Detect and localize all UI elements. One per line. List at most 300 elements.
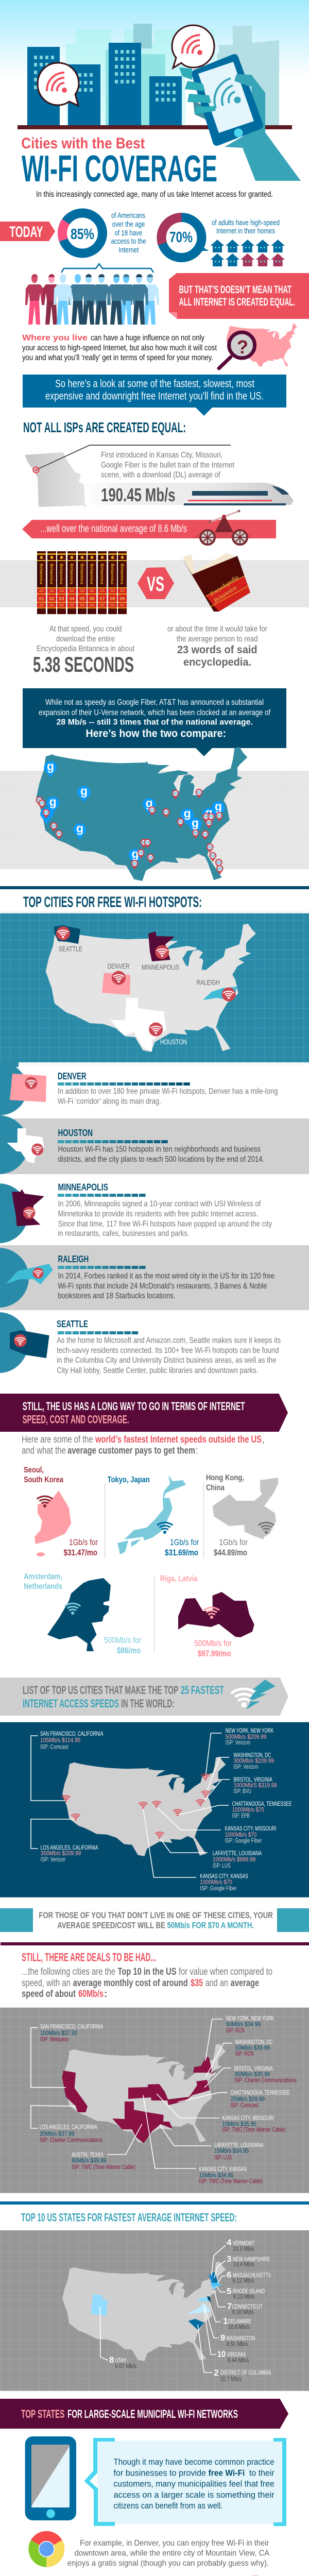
highlighted states <box>91 2272 221 2330</box>
icon: nine encyclopedia volumes: 02 <box>49 596 55 601</box>
panel: Houston: districts, and the city plans to reach 500 locations by the end of 2014. <box>58 1155 264 1164</box>
Google Fiber pins: g <box>192 816 199 829</box>
panel: Tokyo <box>108 1475 199 1557</box>
text: of adults: of adults have high-speed <box>212 219 280 227</box>
rank labels: DISTRICT OF COLUMBIA <box>220 2370 271 2376</box>
icon: nine encyclopedia volumes: 04 <box>69 596 75 601</box>
city labels: ISP: RCN <box>235 2051 253 2057</box>
text: top 10 for value: average monthly cost of around <box>73 1978 188 1989</box>
city labels: 15Mb/s $34.95 <box>214 2148 249 2155</box>
callout: AT&T comparison: Here’s how the two compare: <box>85 728 226 740</box>
rank labels: 4 <box>227 2238 232 2247</box>
city labels: ISP: LUS <box>214 2155 232 2161</box>
panel: Hong Kong: $44.89/mo <box>214 1548 247 1557</box>
callout: municipal free access: Though it may have become common practice <box>113 2457 274 2467</box>
Google Fiber pins: g <box>146 796 153 810</box>
leader lines <box>100 2245 226 2372</box>
panel: Houston: HOUSTON <box>58 1128 93 1138</box>
icon: nine encyclopedia volumes: 05 <box>79 596 85 601</box>
city labels: ISP: LUS <box>213 1863 231 1869</box>
rank labels: 10 <box>217 2349 226 2359</box>
city labels: ISP: Comcast <box>231 2103 259 2109</box>
text: fastest speeds outside the US: : <box>196 1446 198 1456</box>
callout: AT&T comparison: 28 Mb/s -- still 3 times that of the national average. <box>57 718 253 727</box>
banner: top 25 fastest speeds <box>0 1677 288 1716</box>
text: top 10 for value <box>22 1967 272 1999</box>
city labels: 300Mb/s $209.99 <box>234 1758 274 1765</box>
icon: Chrome logo <box>28 2531 64 2567</box>
panel: Riga: Riga, Latvia <box>160 1574 198 1583</box>
panel: Seattle: City Hall lobby, Seattle Center, public libraries and downtown parks. <box>57 1366 258 1375</box>
hand holding phone <box>179 58 301 181</box>
panel: Hong Kong: 1Gb/s for <box>219 1537 248 1547</box>
city labels: 50Mb/s $34.99 <box>226 2022 261 2028</box>
icon: nine encyclopedia volumes: 08 <box>110 596 115 601</box>
text: 23 words <box>167 625 268 668</box>
panel: Amsterdam: Amsterdam, <box>24 1572 62 1581</box>
icon: nine encyclopedia volumes: Britannica <box>69 564 74 584</box>
city labels: KANSAS CITY, KANSAS <box>200 1874 248 1880</box>
icon: phone <box>25 2436 76 2520</box>
text: fastest speeds outside the US: and what the <box>22 1446 66 1456</box>
map: Google Fiber and AT&T coverage <box>36 747 247 881</box>
city labels: 1000Mb/s $70 <box>225 1832 256 1838</box>
text: Denver and Mountain View: downtown area, while the entire city of Mountain View, CA <box>75 2549 269 2558</box>
text: Denver and Mountain View: enjoys a gratis signal (though you can probably guess why). <box>67 2559 269 2568</box>
text: 5.38 seconds: At that speed, you could <box>49 625 122 634</box>
panel: top 25 cities map <box>0 1722 309 1897</box>
icon: open encyclopedia book: Encyclopedia <box>208 573 239 598</box>
icon: US map with magnifier: ? <box>237 336 248 358</box>
city labels: ISP: BVU <box>234 1789 251 1795</box>
panel: Seoul: Seoul, <box>24 1466 44 1475</box>
city labels: NEW YORK, NEW YORK <box>226 1728 273 1734</box>
Google Fiber pins: g <box>80 784 88 798</box>
icon: US map with magnifier <box>219 324 297 368</box>
rank labels: 1 <box>223 2316 228 2326</box>
callout: look at the fastest: So here’s a look at some of the fastest, slowest, most <box>55 378 254 390</box>
panel: hotspot map <box>0 913 309 1062</box>
callout: average speed and cost <box>0 1908 309 1932</box>
header illustration: city skyline <box>0 0 309 181</box>
donut: 85 percent: 85% <box>71 226 94 243</box>
text: top 10 for value: $35 <box>191 1978 203 1989</box>
city labels: LOS ANGELES, CALIFORNIA <box>40 2125 97 2131</box>
text: top 10 for value: ...the following cities are the <box>22 1967 115 1977</box>
rank labels: VERMONT <box>233 2241 254 2247</box>
banner: well over national average: ...well over the national average of 8.6 Mb/s <box>40 523 187 535</box>
icon: nine encyclopedia volumes: 03 <box>59 596 64 601</box>
icon: nine encyclopedia volumes: Britannica <box>39 564 44 584</box>
city labels: ISP: Comcast <box>40 1744 68 1751</box>
city labels: ISP: RCN <box>226 2028 245 2034</box>
text: 5.38 seconds: Encyclopedia Britannica in about <box>37 645 134 653</box>
text: of Americans: over the age <box>112 220 145 229</box>
icon: nine encyclopedia volumes: 06 <box>89 596 95 601</box>
highlighted states <box>62 2057 217 2143</box>
callout: municipal free access: access on a larger scale is something their <box>113 2490 274 2500</box>
text: 23 words: the average person to read <box>177 635 258 643</box>
Missouri map <box>25 452 94 510</box>
Google Fiber pins: g <box>47 759 54 773</box>
wifi markers <box>61 1774 210 1839</box>
text: 23 words: or about the time it would take for <box>167 625 268 634</box>
banner: top 25 fastest speeds: 25 FASTEST <box>181 1684 224 1697</box>
banner: top 25 fastest speeds: LIST OF TOP US CITIES THAT MAKE THE TOP <box>23 1684 178 1697</box>
rank labels: 10.3 Mb/s <box>233 2246 254 2252</box>
text: of adults: Internet in their homes <box>216 227 275 235</box>
text: where you live: you and what you’ll ‘really’ get in terms of speed for your money. <box>22 353 213 362</box>
panel: Raleigh: Wi-Fi spots that include 24 McDonald’s restaurants, 3 Barnes & Noble <box>58 1282 267 1291</box>
Google Fiber pins: g <box>76 822 83 835</box>
callout: municipal free access <box>84 2438 286 2526</box>
today tag: TODAY <box>9 224 43 241</box>
panel: Minneapolis: MINNEAPOLIS <box>58 1182 108 1193</box>
banner: top 25 fastest speeds: INTERNET ACCESS SPEEDS <box>23 1697 119 1710</box>
icon: nine encyclopedia volumes: Britannica <box>110 564 115 584</box>
rank labels: 3 <box>227 2254 231 2264</box>
heading: deals to be had: STILL, THERE ARE DEALS TO BE HAD... <box>22 1951 157 1964</box>
city labels: NEW YORK, NEW YORK <box>226 2016 274 2022</box>
panel: Amsterdam: 500Mb/s for <box>104 1635 141 1645</box>
leader lines <box>31 2019 232 2168</box>
rank labels: RHODE ISLAND <box>233 2289 265 2295</box>
panel: Seoul: 1Gb/s for <box>69 1537 98 1547</box>
text: fastest speeds outside the US: average customer pays to get them <box>67 1446 195 1456</box>
title <box>21 135 217 190</box>
panel: Denver <box>0 1062 278 1115</box>
callout: municipal free access: for businesses to provide <box>113 2468 206 2478</box>
city labels: 1000Mb/s $70 <box>200 1879 232 1886</box>
banner: top states for municipal networks: TOP STATES <box>21 2408 65 2420</box>
dotted band <box>0 560 309 607</box>
city labels: HOUSTON <box>160 1038 187 1046</box>
heading: not all ISPs: NOT ALL ISPs ARE CREATED EQUAL: <box>23 419 186 435</box>
city labels: BRISTOL, VIRGINIA <box>234 2066 273 2072</box>
city labels: ISP: Webpass <box>40 2037 69 2043</box>
city labels: RALEIGH <box>197 978 220 987</box>
callout: municipal free access: free Wi-Fi <box>208 2468 245 2478</box>
text: fastest speeds outside the US: , <box>262 1434 265 1445</box>
panel: Seattle: SEATTLE <box>57 1319 88 1329</box>
rank labels: 9 <box>220 2333 225 2343</box>
banner: well over national average <box>22 520 276 538</box>
panel: Minneapolis <box>0 1182 272 1243</box>
city labels: 60Mb/s $39.99 <box>72 2158 106 2164</box>
city labels: 30Mb/s $37.99 <box>40 2131 74 2138</box>
city labels: ISP: Charter Communications <box>40 2138 102 2144</box>
panel: Denver: Wi-Fi ‘corridor’ along its main drag. <box>58 1097 161 1106</box>
text: where you live: Where you live <box>22 334 88 343</box>
Google Fiber pins: g <box>215 800 222 813</box>
donut: 70 percent <box>162 217 209 258</box>
panel: top 10 states map <box>0 2230 309 2391</box>
title: Cities with the Best <box>21 135 145 152</box>
text: of Americans: of 18 have <box>115 229 142 238</box>
panel: Riga: 500Mb/s for <box>194 1638 232 1648</box>
text: 23 words: encyclopedia. <box>183 656 251 668</box>
city labels: DENVER <box>108 962 129 970</box>
rank labels: 10.8 Mb/s <box>228 2325 250 2331</box>
panel: Seattle <box>0 1312 281 1375</box>
panel: Google Fiber bullet train: scene, with a download (DL) average of <box>101 471 220 480</box>
panel: Tokyo: Tokyo, Japan <box>108 1476 150 1484</box>
text: fastest speeds outside the US: world’s fastest Internet speeds outside the US <box>95 1434 262 1445</box>
icon: nine encyclopedia volumes: Britannica <box>49 564 55 584</box>
city labels <box>40 2016 297 2185</box>
city labels: AUSTIN, TEXAS <box>72 2152 104 2158</box>
city labels: SAN FRANCISCO, CALIFORNIA <box>40 1731 104 1737</box>
text: where you live: your access to high-speed Internet, but also how much it will cost <box>22 344 217 352</box>
panel: Google Fiber bullet train: First introduced in Kansas City, Missouri, <box>101 451 222 460</box>
callout: municipal free access: customers, many municipalities feel that free <box>113 2479 274 2489</box>
state: Washington <box>54 925 80 944</box>
panel: Minneapolis: in restaurants, cafes, businesses and parks. <box>58 1229 189 1238</box>
rank labels: 8.51 Mb/s <box>226 2342 248 2348</box>
city labels: BRISTOL, VIRGINIA <box>234 1777 272 1783</box>
panel: Seoul: South Korea <box>24 1476 63 1484</box>
rank labels: 10.4 Mb/s <box>233 2262 255 2268</box>
panel: Raleigh: bookstores and 18 Starbucks locations. <box>58 1292 175 1300</box>
VS hexagon: VS <box>147 573 164 596</box>
text: top 10 for value: speed of about <box>22 1989 76 1999</box>
panel: Tokyo: 1Gb/s for <box>170 1537 199 1547</box>
city labels: ISP: TWC (Time Warner Cable) <box>199 2179 263 2185</box>
icon: cannon <box>192 510 251 545</box>
icon: nine encyclopedia volumes <box>37 551 127 614</box>
text: of adults <box>212 219 280 235</box>
rank labels: 6 <box>227 2270 231 2280</box>
panel: Riga: $97.99/mo <box>198 1649 231 1658</box>
city buildings <box>27 43 182 125</box>
text: of Americans <box>111 211 146 255</box>
icon: nine encyclopedia volumes: 09 <box>119 596 125 601</box>
city labels: KANSAS CITY, MISSOURI <box>222 2115 274 2122</box>
icons: group of people <box>25 274 159 325</box>
rank labels <box>109 2238 271 2383</box>
Google Fiber pins: g <box>49 795 57 808</box>
callout: average speed and cost: 50Mb/s FOR $70 A MONTH. <box>167 1921 254 1930</box>
icon: open encyclopedia book <box>181 553 250 612</box>
callout: AT&T comparison: While not as speedy as Google Fiber, AT&T has announced a substantial <box>45 698 264 707</box>
city labels: 15Mb/s $34.95 <box>199 2173 234 2179</box>
text: 5.38 seconds: download the entire <box>56 635 115 643</box>
speech bubble with wifi, right <box>172 25 214 68</box>
text: 23 words: 23 words of said <box>177 644 258 656</box>
rank labels: 5 <box>227 2286 231 2296</box>
city labels: ISP: Verizon <box>234 1764 258 1770</box>
wifi badges <box>56 926 236 1037</box>
rank labels: 9.13 Mb/s <box>233 2294 255 2300</box>
city labels: SAN FRANCISCO, CALIFORNIA <box>40 2024 104 2030</box>
text: Denver and Mountain View: For example, in Denver, you can enjoy free Wi-Fi in their <box>80 2539 269 2548</box>
city labels <box>59 945 220 1046</box>
city labels: 300Mb/s $209.99 <box>41 1851 81 1857</box>
callout: look at the fastest <box>23 375 286 416</box>
callout: municipal free access: citizens can benefit from as well. <box>113 2501 222 2511</box>
city labels: SEATTLE <box>59 945 82 953</box>
icon: nine encyclopedia volumes: Britannica <box>59 564 64 584</box>
city labels: ISP: EPB <box>232 1813 250 1819</box>
text: top 10 for value: Top 10 in the US <box>117 1967 176 1977</box>
panel: Hong Kong <box>206 1473 278 1557</box>
panel: Minneapolis: Minnetonka to provide its residents with free public Internet access. <box>58 1210 258 1218</box>
city labels: 15Mb/s $35.95 <box>222 2122 256 2128</box>
text: fastest speeds outside the US: Here are some of the <box>22 1434 93 1445</box>
city labels: ISP: Verizon <box>226 1740 250 1746</box>
icons: houses <box>210 240 285 266</box>
bracket <box>61 264 153 273</box>
rank labels: NEW HAMPSHIRE <box>233 2257 270 2263</box>
state: Texas <box>110 998 166 1052</box>
Google Fiber pins: g <box>184 807 191 820</box>
donut: 85 percent <box>62 213 102 253</box>
city labels: 50Mb/s $39.99 <box>235 2045 270 2052</box>
city labels: LAFAYETTE, LOUISIANA <box>214 2143 264 2149</box>
city labels: MINNEAPOLIS <box>142 963 179 971</box>
text: 5.38 seconds <box>33 625 134 676</box>
rank labels: 8.44 Mb/s <box>228 2358 249 2364</box>
text: of Americans: access to the <box>111 237 146 246</box>
panel: Amsterdam: Netherlands <box>24 1582 62 1591</box>
rank labels: MASSACHUSETTS <box>233 2273 271 2279</box>
Google Fiber pins: g <box>205 806 213 819</box>
state: Colorado <box>102 973 130 995</box>
city labels: ISP: Verizon <box>41 1857 65 1863</box>
text: top 10 for value: : <box>104 1989 107 1999</box>
rank labels: 9.12 Mb/s <box>232 2278 254 2284</box>
callout: municipal free access: to their <box>249 2468 274 2478</box>
panel: Hong Kong: Hong Kong, <box>206 1473 244 1482</box>
text: Denver and Mountain View <box>67 2539 269 2568</box>
rank labels: 10.7 Mb/s <box>220 2377 242 2383</box>
rank labels: 2 <box>214 2368 219 2378</box>
icon: nine encyclopedia volumes: Britannica <box>100 564 105 584</box>
panel: Houston <box>0 1115 309 1174</box>
rank labels: VIRGINIA <box>227 2352 246 2358</box>
icon: nine encyclopedia volumes: Britannica <box>90 564 95 584</box>
text: top 10 for value: speed, with an <box>22 1978 71 1989</box>
panel: Houston: Houston Wi-Fi has 150 hotspots in ten neighborhoods and business <box>58 1145 261 1154</box>
city labels <box>40 1728 292 1892</box>
train <box>84 483 294 505</box>
text: fastest speeds outside the US <box>22 1434 265 1456</box>
panel: Denver: DENVER <box>58 1071 87 1081</box>
text: where you live <box>22 334 217 362</box>
rank labels: 8 <box>109 2355 114 2365</box>
panel: Seoul: $31.47/mo <box>64 1548 97 1557</box>
city labels: KANSAS CITY, KANSAS <box>199 2166 247 2173</box>
city labels: 500Mb/s $209.99 <box>226 1734 266 1740</box>
city labels: 30/Mb/s $30.99 <box>234 2072 270 2078</box>
panel: top 10 value cities map <box>0 2008 309 2193</box>
rank labels: DELAWARE <box>228 2319 252 2325</box>
banner: top states for municipal networks <box>0 2399 288 2429</box>
city labels: ISP: Google Fiber <box>200 1886 236 1892</box>
text: top 10 for value: for value when compared to <box>179 1967 272 1977</box>
city labels: 1000Mb/S $319.99 <box>234 1783 277 1789</box>
today tag <box>0 222 55 241</box>
text: 5.38 seconds: 5.38 SECONDS <box>33 652 134 676</box>
text: top 10 for value: and an <box>205 1978 228 1989</box>
banner: top 25 fastest speeds: IN THE WORLD: <box>121 1697 175 1710</box>
text: of Americans: Internet <box>118 246 139 255</box>
city labels: LOS ANGELES, CALIFORNIA <box>41 1845 98 1851</box>
AT&T pins <box>36 789 224 875</box>
city labels: 1000Mb/s $999.99 <box>213 1857 255 1863</box>
panel: Tokyo: $31.69/mo <box>165 1548 198 1557</box>
text: top 10 for value: average <box>231 1978 259 1989</box>
panel: Google Fiber bullet train: Google Fiber is the bullet train of the Internet <box>101 461 234 470</box>
callout: average speed and cost: AVERAGE SPEED/COST WILL BE <box>57 1921 165 1930</box>
heading: top cities for free hotspots: TOP CITIES FOR FREE WI-FI HOTSPOTS: <box>23 894 202 911</box>
panel: Amsterdam <box>24 1572 141 1655</box>
panel: Seoul <box>24 1466 98 1557</box>
city labels: KANSAS CITY, MISSOURI <box>225 1826 276 1832</box>
banner: long way to go <box>0 1394 288 1432</box>
rank labels: 9.10 Mb/s <box>232 2310 254 2316</box>
Google Fiber pins: g <box>131 847 139 860</box>
icon: nine encyclopedia volumes: 07 <box>99 596 105 601</box>
panel: Raleigh <box>0 1245 309 1310</box>
rank labels: CONNECTICUT <box>232 2304 263 2310</box>
text: where you live: can have a huge influence on not only <box>91 334 204 343</box>
city labels: ISP: TWC (Time Warner Cable) <box>72 2164 135 2171</box>
icon: nine encyclopedia volumes: Britannica <box>79 564 84 584</box>
panel: Raleigh: RALEIGH <box>58 1254 89 1264</box>
city labels: WASHINGTON, DC <box>235 2040 273 2046</box>
banner: long way to go: SPEED, COST AND COVERAGE. <box>23 1413 129 1426</box>
icon: open encyclopedia book: Britannica <box>212 584 238 604</box>
city labels: ISP: Google Fiber <box>225 1838 262 1844</box>
icon: wifi and lightning bolt <box>231 1680 276 1709</box>
icon: nine encyclopedia volumes: 01 <box>39 596 44 601</box>
city labels: LAFAYETTE, LOUISIANA <box>213 1851 262 1857</box>
ground bar <box>18 125 292 129</box>
rank labels: UTAH <box>115 2358 126 2364</box>
panel: Google Fiber bullet train <box>25 445 294 510</box>
panel: Amsterdam: $86/mo <box>117 1646 141 1655</box>
panel: Riga <box>160 1574 254 1658</box>
panel: Minneapolis: In 2006, Minneapolis signed a 10-year contract with USI Wireless of <box>58 1200 261 1209</box>
callout: AT&T comparison <box>23 688 286 756</box>
panel: Google Fiber bullet train: 190.45 Mb/s <box>101 484 176 505</box>
VS hexagon <box>138 567 174 599</box>
rank labels: 7 <box>227 2301 232 2311</box>
rank labels: WASHINGTON <box>226 2336 255 2342</box>
city labels: WASHINGTON, DC <box>234 1753 271 1759</box>
state: North Carolina <box>203 987 237 1000</box>
Google Fiber pins <box>40 759 225 866</box>
icon: nine encyclopedia volumes: Britannica <box>119 564 125 584</box>
banner: not all internet is equal <box>169 273 309 319</box>
city labels: 105Mb/s $114.95 <box>40 1738 80 1744</box>
city labels: 25Mb/s $39.99 <box>231 2096 265 2103</box>
panel: Hong Kong: China <box>206 1484 225 1493</box>
text: top 10 for value: 60Mb/s <box>78 1989 104 1999</box>
city labels: 100Mb/s $37.50 <box>40 2030 77 2037</box>
rank labels: 9.07 Mb/s <box>115 2364 136 2370</box>
text: of Americans: of Americans <box>111 211 145 220</box>
donut: 70 percent: 70% <box>169 229 193 246</box>
leader lines <box>31 1733 230 1877</box>
dotted band <box>0 771 309 869</box>
city labels: 1000Mb/s $70 <box>232 1807 264 1814</box>
speech bubble with wifi, left <box>38 63 79 106</box>
city labels: ISP: TWC (Time Warner Cable) <box>222 2127 286 2133</box>
background skyline <box>66 24 279 125</box>
state: Minnesota <box>148 931 175 961</box>
